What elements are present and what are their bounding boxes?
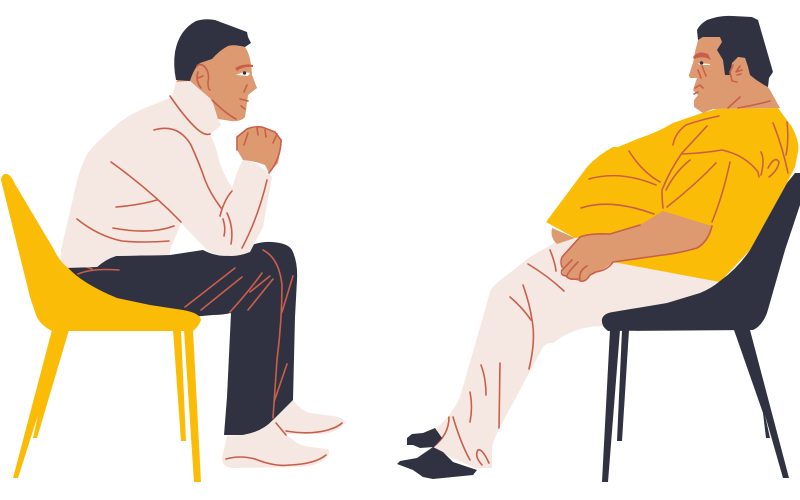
yellow chair legs [13,330,201,482]
yellow chair seat and back [1,174,201,331]
right man: large man on dark chair [397,16,798,479]
right man belly skin [552,228,575,244]
left man trousers [66,242,297,435]
right man socks [397,428,477,479]
left man hands [237,127,282,173]
right man trouser creases [433,250,564,465]
right man facial lines [694,65,770,108]
right man ear [732,57,748,85]
left man hair [174,19,251,81]
right man shirt [546,108,798,282]
right man head [689,16,780,113]
right man shirt creases [581,116,788,222]
dark chair [602,173,800,482]
yellow chair [1,174,201,482]
left man shoe lines [226,423,342,465]
left man: slim man on yellow chair [61,19,345,468]
dark chair legs [602,330,789,482]
left man facial lines [197,64,248,119]
right man trousers [433,238,730,468]
right man hair [697,16,773,87]
left man sweater [61,81,272,268]
left man head [174,19,257,121]
right man eye [693,53,711,65]
left man face [176,44,257,121]
right man arm and hand [561,211,712,282]
left man trouser creases [70,250,293,418]
dark chair seat and back [602,173,800,331]
left man shoes [222,400,345,468]
right man neck and face [689,37,780,113]
left man sweater creases [77,96,267,248]
left man eye [235,64,253,76]
